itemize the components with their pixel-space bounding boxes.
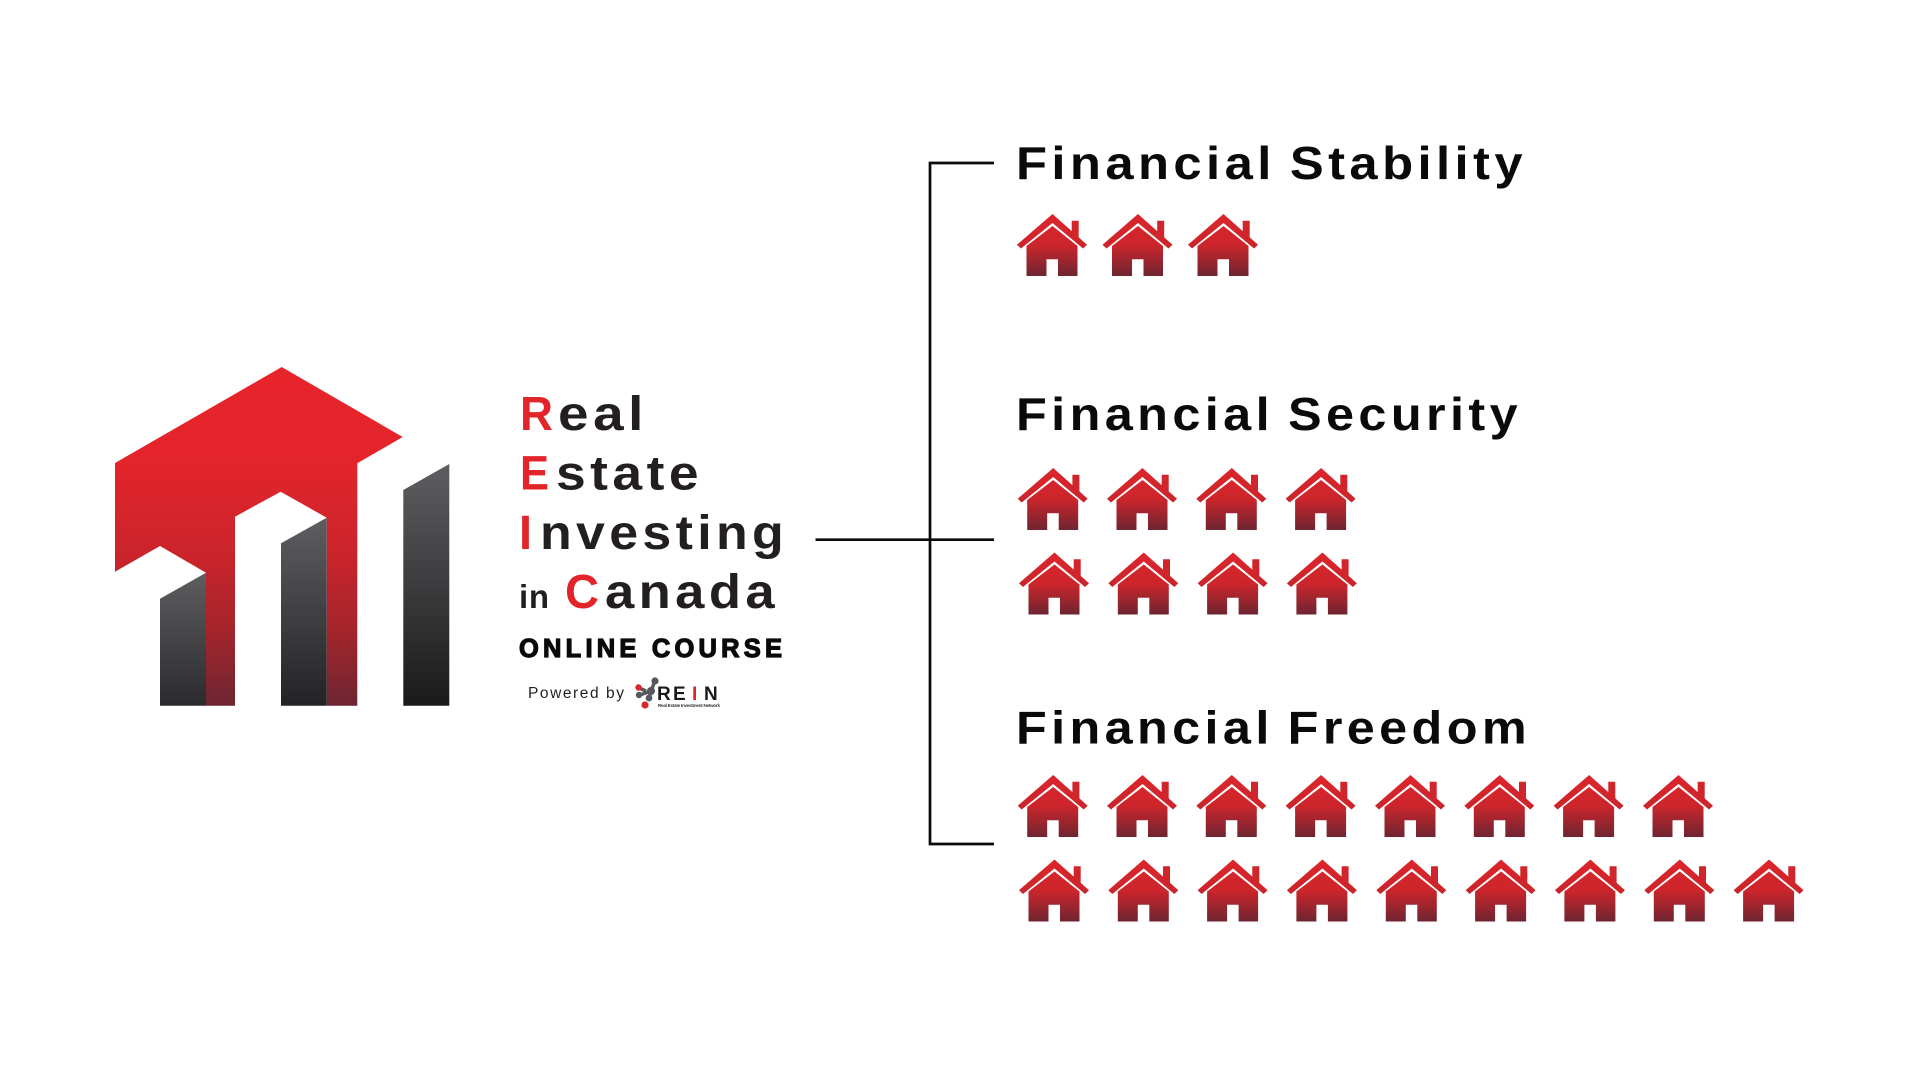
powered by line: Powered by [528, 685, 624, 702]
logo gray bar middle [281, 518, 327, 706]
REIN wordmark: N [704, 684, 718, 705]
REIN wordmark: R [657, 684, 671, 705]
panel: financial stability [1016, 137, 1527, 276]
title line: in Canada [519, 566, 779, 619]
REIN wordmark: I [692, 684, 697, 705]
title line: Investing: nvesting [540, 507, 788, 560]
heading: financial stability: Financial Stability [1016, 137, 1527, 189]
title line: Investing: I [519, 507, 532, 560]
REIN wordmark [657, 684, 720, 708]
title line: in Canada: anada [605, 566, 779, 619]
title line: in Canada: C [565, 566, 599, 619]
icon: REIN network mark [635, 677, 659, 709]
logo red roof and columns [115, 367, 403, 706]
houses: 8 icons [1018, 468, 1357, 614]
heading: financial freedom: Financial Freedom [1016, 702, 1531, 754]
panel: financial security [1016, 388, 1522, 614]
panel: financial freedom [1016, 702, 1804, 922]
course title block [519, 388, 788, 709]
logo gray bar left [160, 573, 206, 706]
title line: Estate: state [556, 448, 703, 500]
title line: Real: R [520, 388, 553, 441]
bracket connector [816, 163, 994, 844]
subtitle: online course: ONLINE COURSE [519, 635, 782, 663]
title line: Estate: E [520, 448, 549, 500]
heading: financial security: Financial Security [1016, 388, 1522, 440]
houses: 3 icons [1017, 214, 1258, 276]
title line: Real [520, 388, 648, 441]
logo gray bar right [403, 464, 449, 706]
REIN wordmark: Real Estate Investment Network [658, 703, 720, 708]
title line: Real: eal [558, 388, 648, 441]
title line: in Canada: in [519, 578, 549, 615]
REIN wordmark: E [673, 684, 686, 705]
houses: 17 icons [1018, 775, 1804, 922]
logo: house and bars [115, 367, 449, 706]
